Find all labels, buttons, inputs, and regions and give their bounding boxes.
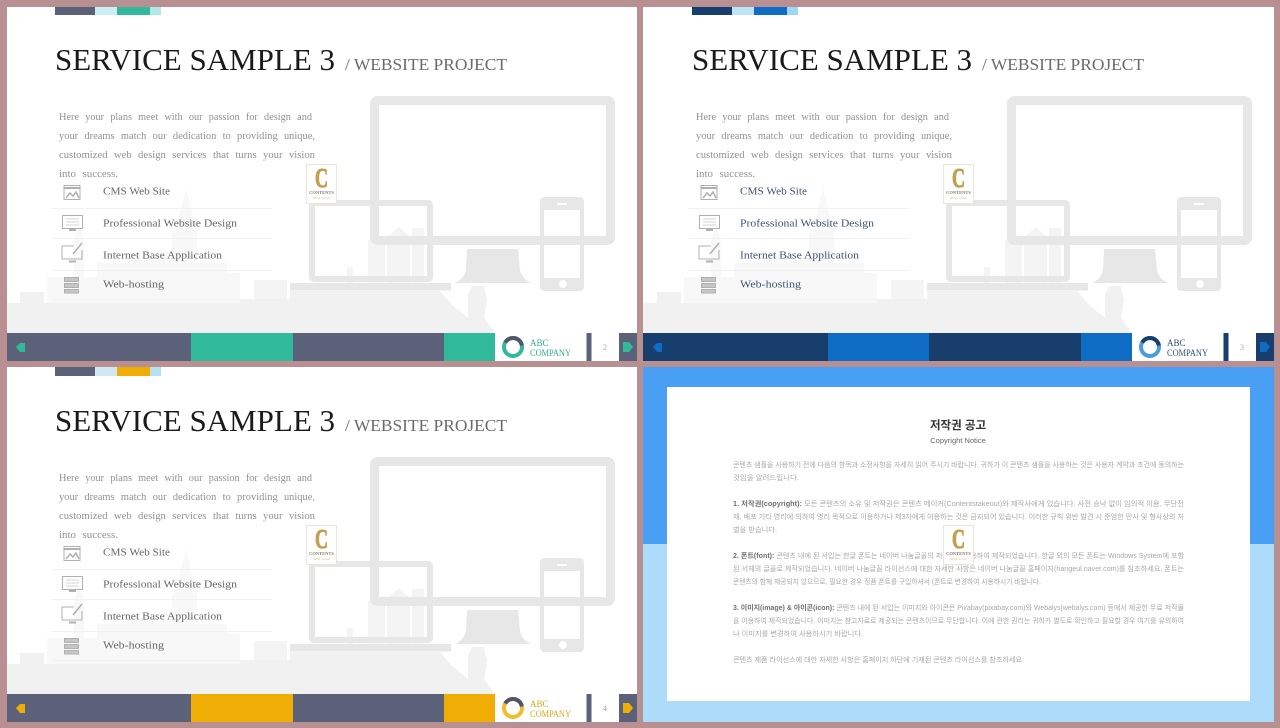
section 2 font	[733, 551, 1185, 586]
arrow left	[16, 343, 25, 352]
intro paragraph: 것임을 알려드립니다.	[733, 473, 799, 482]
top colour bar	[692, 7, 798, 15]
section 2 font: 된 서체의 글꼴로 제작되었습니다. 네이버 나눔글꼴 라이선스에 대한 자세한 사항은 네이버 나눔글꼴 홈페이지(hangeul.naver.com)를 참조하세요. 폰트는	[733, 564, 1185, 573]
logo stamp: CONTENTS	[309, 190, 334, 195]
icon: monitor	[62, 576, 82, 591]
logo stamp: C	[315, 163, 328, 193]
body text	[59, 473, 315, 541]
logo stamp: REAL LOGO	[313, 196, 331, 200]
logo stamp: REAL LOGO	[313, 557, 331, 561]
company name: COMPANY	[530, 709, 571, 719]
arrow right	[623, 342, 633, 352]
company name: ABC	[530, 699, 549, 709]
icon: monitor	[700, 216, 720, 230]
company name: COMPANY	[1167, 348, 1208, 358]
panel: slide 3 blue	[643, 7, 1274, 361]
label: CMS: CMS Web Site	[103, 548, 170, 558]
body text: your dreams match our dedication to providing unique,	[59, 492, 315, 503]
skyline background	[643, 188, 1132, 333]
logo stamp	[306, 524, 336, 564]
body text: Here your plans meet with our passion for design and	[59, 112, 312, 123]
icon: server	[702, 278, 716, 293]
page number: 4	[603, 704, 607, 713]
icon: pencil monitor	[62, 604, 82, 622]
section 2 font: 콘텐츠의 함께 제공되지 않으므로, 필요한 경우 정품 폰트를 구입하셔서 (폰트로 변경하여 사용하시기 바랍니다.	[733, 577, 1041, 586]
company logo	[504, 338, 522, 356]
top colour bar	[55, 7, 161, 15]
icon: pencil monitor	[62, 243, 82, 262]
device illustration	[927, 100, 1248, 291]
section 1 copyright	[733, 499, 1184, 534]
title: SERVICE SAMPLE 3	[55, 403, 335, 438]
label: design: Professional Website Design	[103, 218, 238, 230]
title: SERVICE SAMPLE 3	[55, 42, 335, 77]
body text	[696, 112, 952, 180]
logo stamp: REAL LOGO	[950, 196, 968, 200]
section 1 copyright: 1. 저작권(copyright): 모든 콘텐츠의 소유 및 저작권은 콘텐츠 메이커(Contentstakeout)와 제작사에게 있습니다. 사전 승낙 없이 임의적 이용, 무단전	[733, 499, 1184, 508]
label: design: Professional Website Design	[740, 218, 875, 230]
service list	[52, 186, 272, 300]
top colour bar	[55, 367, 161, 376]
footer bar	[643, 333, 1274, 361]
closing line: 콘텐츠 제품 라이선스에 대한 자세한 사항은 홈페이지 하단에 기재된 콘텐츠 라이선스를 참조하세요.	[733, 655, 1024, 664]
company name: COMPANY	[530, 348, 571, 358]
company logo	[504, 699, 522, 717]
arrow right	[1260, 342, 1270, 352]
label: hosting: Web-hosting	[740, 280, 802, 290]
section 3 image and icon	[733, 603, 1185, 638]
logo stamp: CONTENTS	[946, 551, 971, 556]
device illustration	[290, 462, 610, 652]
arrow left	[653, 343, 662, 352]
body text: customized web design services that turns your vision	[59, 150, 315, 161]
service list	[689, 186, 909, 300]
page number: 2	[603, 343, 607, 352]
label: design: Professional Website Design	[103, 580, 238, 590]
notice subheading: Copyright Notice	[930, 436, 986, 445]
section 3 image and icon: 을 이용하여 제작되었습니다. 이미지는 참고자료로 제공되는 콘텐츠이므로 무단합니다. 이에 관한 권리는 귀하가 별도로 확인하고 필요할 경우 여기를 유의하여	[733, 616, 1184, 625]
body text: Here your plans meet with our passion for design and	[59, 473, 312, 484]
logo stamp	[944, 163, 974, 204]
company name: ABC	[1167, 338, 1186, 348]
label: hosting: Web-hosting	[103, 640, 165, 652]
skyline background	[7, 549, 495, 694]
subtitle: / WEBSITE PROJECT	[345, 416, 508, 435]
notice heading: 저작권 공고	[930, 418, 986, 432]
body text: your dreams match our dedication to providing unique,	[696, 131, 952, 142]
body text: into success.	[59, 169, 118, 180]
logo stamp: C	[952, 163, 965, 193]
company logo	[1141, 338, 1159, 356]
panel: slide 4 amber	[7, 367, 637, 722]
section 3 image and icon: 나 이미지를 변경하여 사용하시기 바랍니다.	[733, 629, 863, 638]
label: hosting: Web-hosting	[103, 280, 165, 290]
icon: server	[64, 638, 78, 654]
company name	[1167, 338, 1208, 358]
body text: your dreams match our dedication to providing unique,	[59, 131, 315, 142]
icon: server	[64, 278, 78, 293]
logo stamp: C	[315, 524, 328, 554]
footer bar	[7, 333, 637, 361]
icon: image	[64, 186, 80, 200]
subtitle: / WEBSITE PROJECT	[982, 55, 1145, 74]
logo stamp: REAL LOGO	[950, 557, 968, 561]
section 2 font: 2. 폰트(font): 콘텐츠 내에 된 서입는 한글 폰트는 네이버 나눔글꼴의 저작물을 사용하여 제작되었습니다. 한글 외의 모든 폰트는 Windows System에 포함	[733, 551, 1185, 560]
panel: slide 2 green	[7, 7, 637, 361]
body text: into success.	[59, 530, 118, 541]
icon: monitor	[62, 216, 82, 230]
icon: image	[64, 546, 80, 560]
device illustration	[290, 100, 610, 291]
arrow left	[16, 704, 25, 713]
section 3 image and icon: 3. 이미지(image) & 아이콘(icon): 콘텐츠 내에 된 서입는 이미지와 아이콘은 Pixabay(pixabay.com)와 Webalys(webalys.com) 등에서 제공한 무료 저작물	[733, 603, 1185, 612]
arrow right	[623, 703, 633, 713]
label: application: Internet Base Application	[740, 250, 860, 262]
section 1 copyright: 벌을 받습니다.	[733, 525, 777, 534]
intro paragraph	[733, 460, 1185, 482]
logo stamp	[944, 524, 974, 564]
body text	[59, 112, 315, 180]
logo stamp: C	[952, 524, 965, 554]
company name: ABC	[530, 338, 549, 348]
body text: into success.	[696, 169, 755, 180]
skyline background	[7, 188, 495, 333]
icon: pencil monitor	[699, 243, 719, 262]
label: application: Internet Base Application	[103, 250, 223, 262]
body text: customized web design services that turns your vision	[696, 150, 952, 161]
footer bar	[7, 694, 637, 722]
icon: image	[701, 186, 717, 200]
page number: 3	[1240, 343, 1244, 352]
service list	[52, 546, 272, 660]
company name	[530, 699, 571, 719]
logo stamp: CONTENTS	[946, 190, 971, 195]
panel: copyright notice	[643, 367, 1274, 722]
label: CMS: CMS Web Site	[740, 186, 807, 198]
logo stamp: CONTENTS	[309, 551, 334, 556]
label: application: Internet Base Application	[103, 612, 223, 622]
company name	[530, 338, 571, 358]
body text: Here your plans meet with our passion for design and	[696, 112, 949, 123]
logo stamp	[306, 163, 336, 204]
title: SERVICE SAMPLE 3	[692, 42, 972, 77]
body text: customized web design services that turns your vision	[59, 511, 315, 522]
subtitle: / WEBSITE PROJECT	[345, 55, 508, 74]
section 1 copyright: 재, 배포 기타 영리에 의하여 영리 목적으로 이용하거나 제3자에게 이용하는 것은 금지되어 있습니다. 이러한 규칙 위반 발견 시 준엄한 민사 및 형사상의 처	[733, 512, 1184, 521]
label: CMS: CMS Web Site	[103, 186, 170, 198]
intro paragraph: 콘텐츠 샘플을 사용하기 전에 다음의 항목과 소정사항을 자세히 읽어 주시기 바랍니다. 귀하가 이 콘텐츠 샘플을 사용하는 것은 사용자 계약과 조건에 동의하는	[733, 460, 1185, 469]
